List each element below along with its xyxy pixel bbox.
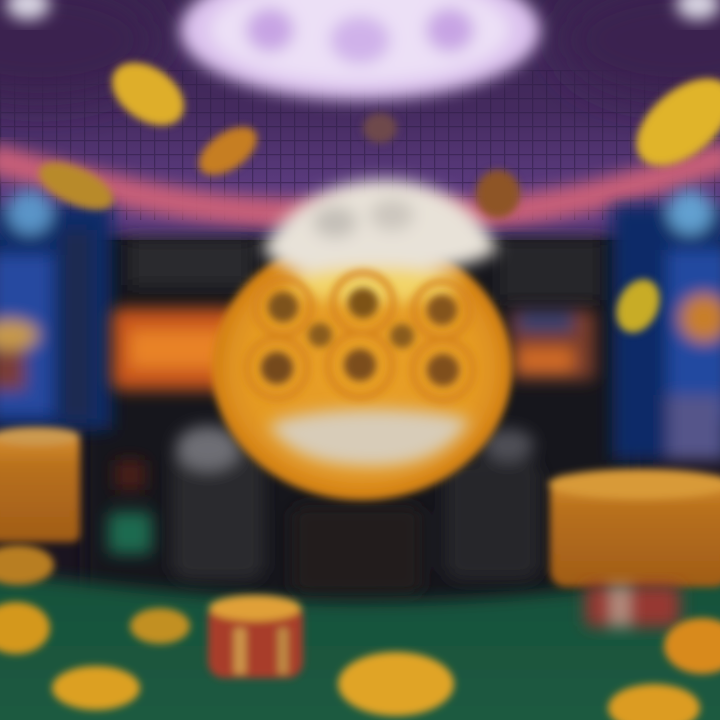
corner lights — [6, 0, 720, 20]
dark back wall — [85, 236, 635, 606]
floating coins — [32, 50, 720, 340]
dark machines — [172, 426, 540, 595]
right orange sign — [510, 310, 595, 380]
emblem eye holes — [261, 288, 459, 386]
pink curved band — [0, 155, 720, 214]
golden emblem — [212, 180, 512, 498]
left orange sign — [112, 308, 237, 390]
emblem lower smile — [268, 409, 470, 466]
right coin stack — [548, 469, 720, 587]
small green and red lights — [108, 460, 152, 554]
emblem scallops — [247, 273, 473, 400]
table coins — [0, 545, 720, 720]
emblem top white pile — [262, 180, 498, 303]
ceiling light — [180, 0, 540, 100]
right blue column — [612, 190, 720, 460]
left coin stack — [0, 427, 80, 542]
emblem ring — [212, 238, 512, 498]
red chip stack on table — [208, 595, 303, 678]
left blue column — [0, 190, 112, 430]
red chips under right stack — [585, 585, 680, 627]
ceiling — [0, 0, 720, 240]
green table — [0, 570, 720, 720]
